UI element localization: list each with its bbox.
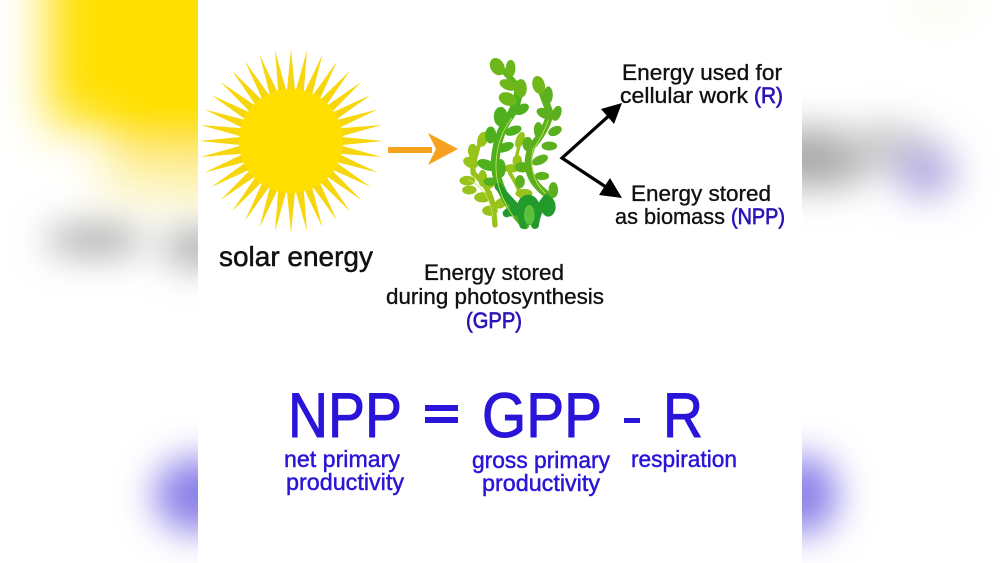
- mid green frond: [477, 57, 529, 225]
- white centre panel: [198, 0, 802, 563]
- text: energy used for cellular work: Energy used for: [622, 60, 783, 85]
- text: energy used for cellular work: (R): [754, 83, 783, 108]
- label: gross primary productivity: productivity: [482, 470, 601, 496]
- blurred background: left side: [45, 0, 310, 533]
- light frond left: [461, 132, 531, 225]
- label: net primary productivity: [284, 446, 405, 495]
- label: gross primary productivity: gross primary: [472, 447, 610, 473]
- label: net primary productivity: net primary: [284, 446, 400, 472]
- label: gross primary productivity: [472, 447, 610, 496]
- frond highlights: [468, 118, 548, 217]
- text: energy used for cellular work: cellular work: [620, 83, 749, 108]
- blurred background: right side: [750, 4, 980, 535]
- label: respiration: respiration: [631, 446, 737, 472]
- dark base: [498, 187, 556, 225]
- arrows: branching to R and NPP: [562, 103, 622, 198]
- text: energy stored as biomass: as biomass: [615, 204, 725, 229]
- formula: NPP = GPP - R: [288, 381, 703, 451]
- arrow: sun to plant: [388, 133, 458, 165]
- text: energy stored as biomass: [615, 181, 785, 229]
- text: energy stored as biomass: Energy stored: [631, 181, 771, 206]
- right frond: [516, 76, 562, 197]
- formula: NPP = GPP - R: GPP: [482, 381, 602, 451]
- text: energy stored during photosynthesis: (GPP): [466, 308, 522, 333]
- formula: NPP = GPP - R: NPP: [288, 381, 402, 451]
- label: net primary productivity: productivity: [286, 469, 405, 495]
- formula: NPP = GPP - R: R: [663, 381, 703, 451]
- icon: seaweed plant: [461, 57, 562, 225]
- icon: sun: [199, 49, 383, 233]
- text: energy stored as biomass: (NPP): [731, 204, 785, 229]
- text: energy stored during photosynthesis: Energy stored: [424, 260, 564, 285]
- text: energy stored during photosynthesis: [386, 260, 604, 333]
- text: energy stored during photosynthesis: during photosynthesis: [386, 284, 604, 309]
- text: energy used for cellular work: [620, 60, 783, 108]
- label: solar energy: solar energy: [219, 241, 373, 272]
